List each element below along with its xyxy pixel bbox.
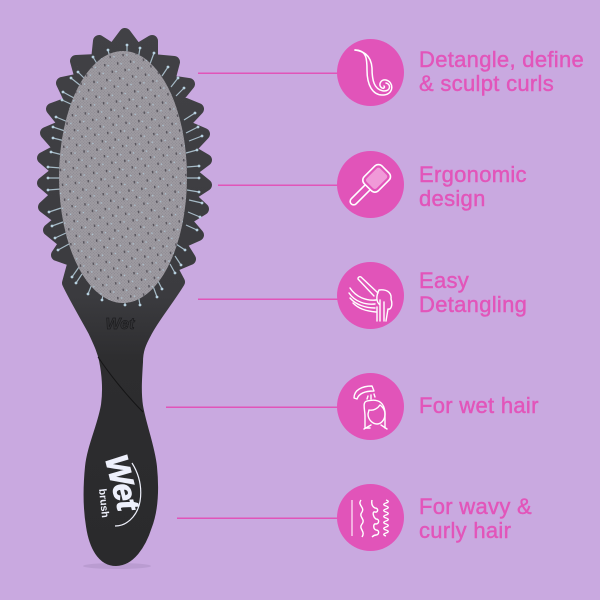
icon: curl <box>337 39 404 106</box>
wavy strand <box>360 500 363 537</box>
text: detangle, define and sculpt curls <box>419 47 584 96</box>
icon: wet hair <box>337 373 404 440</box>
text: for wavy and curly hair: curly hair <box>419 518 511 543</box>
cushion pins <box>59 54 187 300</box>
logo arc <box>115 463 141 526</box>
brush <box>43 34 206 569</box>
brush head and handle body <box>43 34 206 560</box>
text: detangle, define and sculpt curls: Detangle, define <box>419 47 584 72</box>
logo sub word: brush <box>96 488 111 518</box>
text: for wavy and curly hair <box>419 494 532 543</box>
connector lines <box>166 72 340 519</box>
printed logo <box>96 451 147 526</box>
embossed small logo: Wet <box>105 316 135 333</box>
tight curly strand <box>384 500 388 536</box>
text: ergonomic design <box>419 162 527 211</box>
brush shadow <box>83 563 151 569</box>
text: easy detangling: Easy <box>419 268 469 293</box>
icon: easy detangling <box>337 262 404 329</box>
text: ergonomic design: Ergonomic <box>419 162 527 187</box>
looped strand <box>372 500 379 537</box>
text: detangle, define and sculpt curls: & sculpt curls <box>419 71 554 96</box>
mesh cushion <box>59 51 187 303</box>
text: easy detangling: Detangling <box>419 292 527 317</box>
icon: wavy and curly hair <box>337 484 404 551</box>
handle seam <box>98 357 143 412</box>
pins outside the cushion <box>48 45 202 305</box>
icon: brush <box>337 151 404 218</box>
straight strand <box>351 500 353 536</box>
text: easy detangling <box>419 268 527 317</box>
logo word: Wet <box>98 451 147 515</box>
text: for wet hair: For wet hair <box>419 393 539 418</box>
text: ergonomic design: design <box>419 186 486 211</box>
text: for wavy and curly hair: For wavy & <box>419 494 532 519</box>
